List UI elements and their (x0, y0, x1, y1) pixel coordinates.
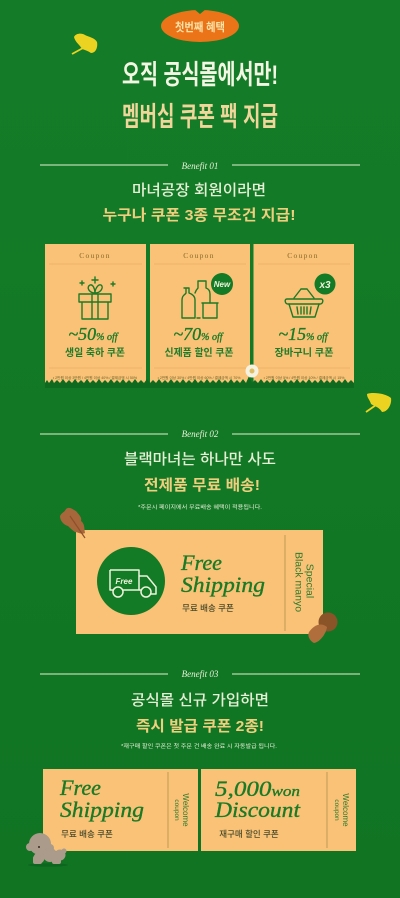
coupon: free shipping: Black manyo (292, 552, 304, 612)
section heading: benefit 02: 전제품 무료 배송! (144, 477, 260, 494)
coupon: free shipping (76, 530, 323, 634)
coupon: 5,000 won discount: Welcome (341, 793, 350, 827)
coupon: birthday (45, 244, 146, 383)
section heading: benefit 02: 블랙마녀는 하나만 사도 (124, 451, 276, 468)
coupon: 5,000 won discount: coupon (333, 799, 340, 821)
coupon: new products: Coupon (183, 251, 215, 260)
coupon: birthday: ~50% off (68, 324, 119, 344)
badge: x3: x3 (318, 280, 331, 291)
section heading: benefit 03: Benefit 03 (182, 669, 219, 679)
section heading: benefit 02 (40, 429, 360, 511)
coupon: welcome free shipping: Welcome (181, 793, 190, 827)
coupon: new products: • 2만원 이상 30% / 4만원 이상 60% / 결제금액 시 70% (158, 375, 241, 380)
main title: 오직 공식몰에서만! (122, 60, 278, 90)
section heading: benefit 01: Benefit 01 (182, 161, 218, 171)
coupon: 5,000 won discount: Discount (214, 797, 301, 822)
coupon: basket: • 2만원 이상 5% / 4만원 이상 10% / 결제금액 시 15% (264, 375, 345, 380)
main title (122, 60, 278, 132)
section heading: benefit 03: 즉시 발급 쿠폰 2종! (136, 718, 264, 735)
coupon: 5,000 won discount: 재구매 할인 쿠폰 (219, 829, 279, 839)
badge: first benefit (161, 9, 239, 42)
icon: cosmetic bottles (182, 281, 218, 318)
badge: first benefit: 첫번째 혜택 (175, 20, 225, 34)
coupon: new products (150, 244, 250, 383)
coupon: free shipping: 무료 배송 쿠폰 (182, 603, 234, 613)
coupon: basket (254, 244, 354, 383)
section heading: benefit 01: 마녀공장 회원이라면 (132, 182, 266, 199)
coupon: birthday: 생일 축하 쿠폰 (65, 346, 125, 359)
section heading: benefit 03 (40, 669, 360, 750)
coupon: free shipping: Shipping (181, 572, 265, 597)
icon: brown leaf (60, 508, 85, 538)
icon: yellow ginkgo leaf right (366, 393, 391, 412)
coupon: basket: 장바구니 쿠폰 (274, 346, 334, 359)
coupon: welcome free shipping: coupon (173, 799, 180, 821)
section heading: benefit 03: 공식몰 신규 가입하면 (131, 692, 269, 709)
section heading: benefit 01 (40, 161, 360, 224)
section heading: benefit 02: Benefit 02 (182, 429, 219, 439)
coupon: basket: Coupon (287, 251, 319, 260)
coupon: welcome free shipping (43, 769, 198, 851)
coupon: free shipping: Free (180, 550, 222, 575)
icon: yellow ginkgo leaf top (72, 34, 97, 54)
section heading: benefit 03: *재구매 할인 쿠폰은 첫 주문 건 배송 완료 시 자동발급 됩니다. (121, 742, 278, 750)
coupon: basket: ~15% off (278, 324, 329, 344)
badge: new: New (214, 280, 231, 289)
coupon: 5,000 won discount (201, 769, 356, 851)
icon: green circle with truck (97, 547, 165, 615)
coupon: new products: 신제품 할인 쿠폰 (164, 346, 234, 359)
icon: fluffy dog (26, 833, 68, 867)
section heading: benefit 02: *주문시 페이지에서 무료배송 혜택이 적용됩니다. (138, 503, 263, 511)
icon: white flower (246, 364, 258, 378)
icon: green circle with truck: Free (116, 577, 133, 586)
coupon: birthday: Coupon (79, 251, 111, 260)
coupon: welcome free shipping: Free (59, 775, 101, 800)
grass strip along coupons (45, 376, 354, 388)
coupon: 5,000 won discount: 5,000 won (215, 776, 300, 801)
coupon: new products: ~70% off (173, 324, 224, 344)
section heading: benefit 01: 누구나 쿠폰 3종 무조건 지급! (102, 207, 296, 224)
icon: gift box (79, 277, 115, 319)
coupon: welcome free shipping: Shipping (60, 797, 144, 822)
coupon: birthday: • 2만원 이상 3만원 / 4만원 이상 40% / 결제금액 시 50% (53, 375, 138, 380)
coupon: free shipping: Special (304, 564, 316, 598)
icon: shopping basket (285, 289, 323, 317)
main title: 멤버십 쿠폰 팩 지급 (122, 102, 278, 132)
icon: acorn (308, 612, 338, 643)
coupon: welcome free shipping: 무료 배송 쿠폰 (61, 829, 113, 839)
